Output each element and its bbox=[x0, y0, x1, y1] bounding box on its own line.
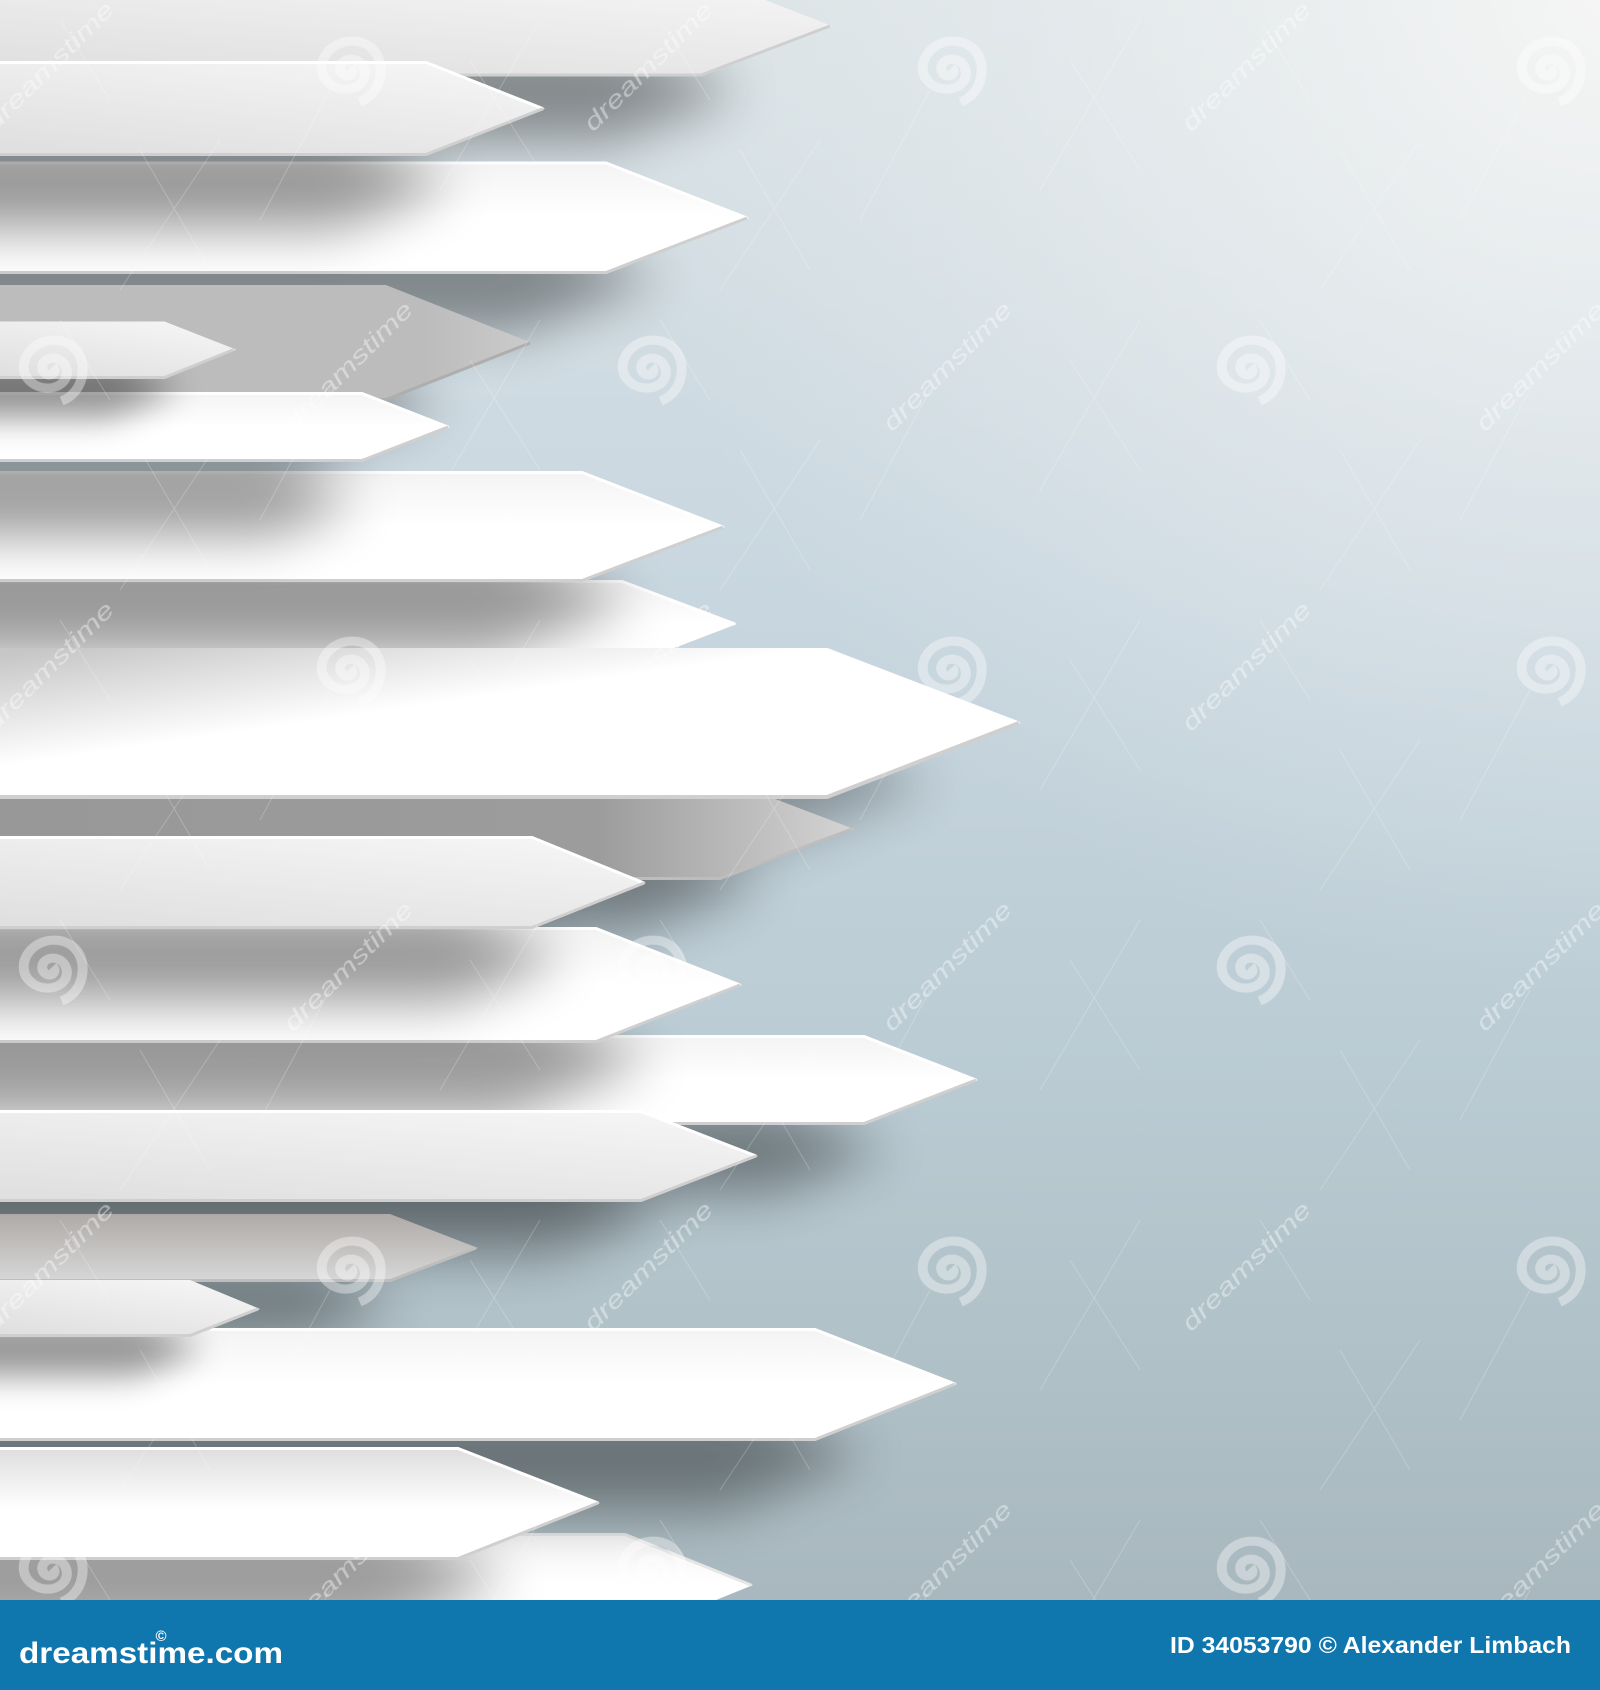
arrow 8 bbox=[0, 580, 737, 668]
watermark dreamstime text: dreamstime bbox=[877, 296, 1018, 437]
watermark dreamstime text: dreamstime bbox=[1470, 1496, 1600, 1637]
watermark dreamstime text: dreamstime bbox=[578, 1196, 719, 1337]
logo copyright mark: © bbox=[155, 1628, 167, 1645]
arrow 15 bbox=[0, 1214, 478, 1282]
arrow 9 bbox=[0, 648, 1021, 799]
arrow 7 bbox=[0, 471, 725, 582]
watermark dreamstime text: dreamstime bbox=[1470, 296, 1600, 437]
watermark dreamstime text: dreamstime bbox=[1176, 0, 1317, 137]
arrow 11 bbox=[0, 836, 646, 929]
arrow 3 bbox=[0, 162, 749, 274]
watermark dreamstime text: dreamstime bbox=[1176, 596, 1317, 737]
arrow 18 bbox=[0, 1447, 600, 1560]
arrow 5 bbox=[0, 322, 236, 379]
arrow 14 bbox=[0, 1110, 758, 1202]
arrow 4 bbox=[0, 285, 532, 401]
watermark dreamstime text: dreamstime bbox=[1470, 896, 1600, 1037]
watermark dreamstime text: dreamstime bbox=[578, 0, 719, 137]
watermark dreamstime text: dreamstime bbox=[877, 1496, 1018, 1637]
arrow 17 bbox=[0, 1328, 957, 1441]
watermark dreamstime text: dreamstime bbox=[578, 596, 719, 737]
watermark dreamstime text: dreamstime bbox=[877, 896, 1018, 1037]
arrow 6 bbox=[0, 392, 450, 462]
arrow 12 bbox=[0, 927, 742, 1043]
image credit: ID 34053790 © Alexander Limbach bbox=[1170, 1632, 1571, 1658]
watermark dreamstime text: dreamstime bbox=[1176, 1196, 1317, 1337]
footer banner bbox=[0, 1600, 1600, 1690]
logo text: dreamstime.com bbox=[19, 1637, 283, 1670]
arrow 16 bbox=[0, 1280, 260, 1337]
arrow 13 bbox=[0, 1035, 978, 1125]
watermark dreamstime text: dreamstime bbox=[278, 896, 419, 1037]
watermark dreamstime text: dreamstime bbox=[278, 296, 419, 437]
arrow 19 bbox=[0, 1533, 753, 1637]
arrow 10 bbox=[0, 778, 854, 880]
arrow 2 bbox=[0, 61, 545, 156]
watermark dreamstime text: dreamstime bbox=[278, 1496, 419, 1637]
arrow 1 bbox=[0, 0, 832, 76]
